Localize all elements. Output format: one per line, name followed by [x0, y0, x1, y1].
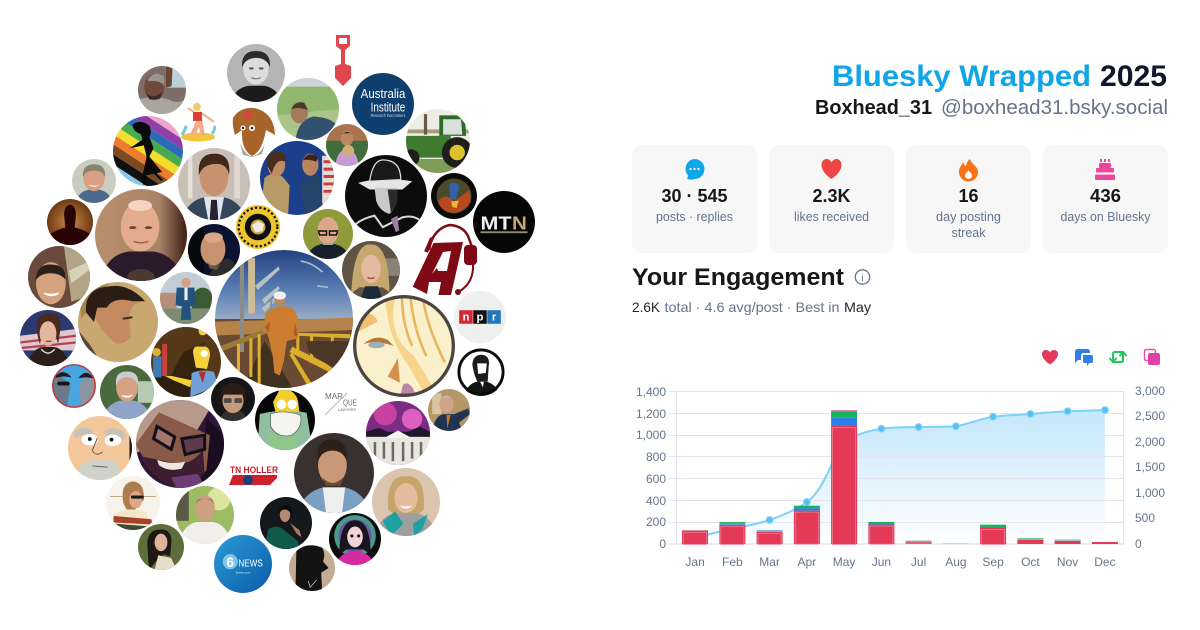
left axis labels: 400 — [646, 494, 666, 508]
avatar: Fetterman — [188, 224, 240, 276]
avatar: The Australia Institute logo: Institute — [371, 99, 405, 114]
bar: Dec — [1092, 542, 1118, 544]
grid lines — [669, 391, 1124, 544]
avatar: silhouette on amber — [47, 199, 93, 245]
panel: avatar cluster — [20, 35, 535, 593]
icon: info — [855, 270, 870, 284]
month labels: Jan — [685, 555, 705, 569]
panel: stat cards — [632, 145, 1168, 253]
icon: info: i — [861, 273, 864, 284]
left axis labels: 1,400 — [636, 385, 666, 399]
avatar: man in suit — [178, 148, 250, 220]
month labels: Mar — [759, 555, 780, 569]
avatar: coconut drink — [326, 124, 368, 166]
avatar: green tractor — [403, 109, 473, 173]
card: day posting streak — [906, 145, 1031, 253]
bar: Feb — [719, 522, 745, 544]
avatar: 6 News logo: NEWS — [238, 558, 263, 569]
engagement summary: total · 4.6 avg/post · Best in — [664, 299, 840, 315]
avatar: man with dark glasses — [211, 377, 255, 421]
card: likes received: 2.3K — [812, 186, 850, 206]
bar: May — [831, 410, 857, 544]
card: likes received — [769, 145, 894, 253]
avatar: NPR logo: r — [492, 312, 497, 324]
logo: Marque Lawyers — [325, 391, 357, 415]
avatar: Simpsons bearded old man — [255, 389, 315, 451]
avatar: woman greyscale — [227, 44, 285, 102]
card: day posting streak: streak — [952, 226, 986, 240]
icon: replies — [1075, 349, 1093, 366]
left axis labels: 800 — [646, 450, 666, 464]
right axis labels: 0 — [1135, 537, 1142, 551]
right axis labels: 500 — [1135, 511, 1155, 525]
avatar: bearded man with glasses — [136, 400, 224, 488]
left axis labels — [636, 385, 666, 551]
month labels: Apr — [798, 555, 816, 569]
bar: Aug — [943, 543, 969, 544]
avatar: woman in green garden — [138, 524, 184, 570]
avatar: fiery painting — [431, 173, 477, 219]
bar: Jul — [906, 540, 932, 544]
logo: Marque Lawyers: LAWYERS — [338, 407, 356, 412]
avatar: cartoon old man — [68, 416, 135, 480]
avatar: NPR logo: p — [476, 312, 484, 324]
panel: header — [815, 60, 1168, 119]
logo: Marque Lawyers: MAR — [325, 391, 343, 401]
right axis labels: 2,000 — [1135, 435, 1165, 449]
card: posts and replies — [632, 145, 757, 253]
avatar: Harris handshake — [260, 141, 334, 215]
display name and handle — [815, 97, 1168, 119]
left axis labels: 0 — [659, 537, 666, 551]
avatar: bald man — [95, 189, 187, 286]
bar: Mar — [757, 530, 783, 544]
avatar: MTN logo: MT — [480, 212, 512, 233]
avatar: rhett badge — [236, 205, 280, 249]
month labels: Jun — [872, 555, 891, 569]
avatar: The Australia Institute logo: Research that matters — [371, 113, 405, 118]
avatar: NPR logo — [454, 291, 506, 343]
chart: monthly engagement — [636, 384, 1165, 569]
avatar: woman in green dress — [260, 497, 312, 549]
avatar: bald man with glasses — [303, 209, 353, 259]
avatar: woman with flag — [20, 310, 76, 366]
title: Bluesky Wrapped — [832, 60, 1091, 93]
avatar: big photo refinery worker — [215, 250, 353, 388]
icon: surfer girl — [181, 103, 215, 142]
card: day posting streak: 16 — [958, 186, 978, 206]
month labels: Nov — [1057, 555, 1078, 569]
avatar: The Australia Institute logo — [352, 73, 414, 135]
display name and handle: Boxhead_31 — [815, 97, 932, 119]
engagement summary: May — [844, 299, 871, 315]
left axis labels: 600 — [646, 472, 666, 486]
avatar: long-haired blonde woman — [342, 241, 400, 299]
avatar: Schumer — [428, 389, 470, 431]
left axis labels: 1,000 — [636, 428, 666, 442]
month labels: Feb — [722, 555, 743, 569]
display name and handle: @boxhead31.bsky.social — [941, 97, 1168, 119]
month labels: Dec — [1094, 555, 1116, 569]
icon: quotes — [1144, 350, 1160, 365]
month labels: Oct — [1021, 555, 1040, 569]
bar: Jan — [682, 530, 708, 544]
avatar: Cuban selfie — [28, 246, 90, 308]
avatar: The Australia Institute logo: Australia — [361, 86, 406, 101]
cumulative area — [695, 410, 1105, 544]
title: 2025 — [1100, 60, 1167, 93]
avatar: man in white shirt — [176, 486, 234, 544]
month labels: May — [833, 555, 855, 569]
avatar: blonde hand illustration — [353, 295, 455, 397]
avatar: 6 News logo — [214, 535, 272, 593]
month labels: Aug — [945, 555, 967, 569]
icon: red A headset logo — [413, 225, 477, 295]
card: days on Bluesky: 436 — [1090, 186, 1121, 206]
avatar: George Takei — [100, 365, 154, 419]
bar: Sep — [980, 525, 1006, 544]
avatar: MTN logo: N — [512, 212, 527, 233]
cumulative line — [695, 406, 1108, 538]
month labels — [685, 555, 1116, 569]
right axis labels: 1,500 — [1135, 460, 1165, 474]
avatar: Lincoln engraving — [457, 348, 505, 396]
icon: reposts — [1110, 352, 1126, 362]
bar: Nov — [1055, 539, 1081, 544]
card: posts and replies: 30 · 545 — [662, 186, 728, 206]
bar: Oct — [1017, 538, 1043, 544]
avatar: noir detective — [345, 155, 427, 237]
avatar: Fiennes profile — [78, 282, 158, 362]
avatar: man blue blazer studio — [294, 433, 374, 513]
logo: Marque Lawyers: QUE — [343, 398, 357, 408]
right axis labels: 3,000 — [1135, 384, 1165, 398]
avatar: stadium selfie — [277, 78, 339, 140]
icon: shaggy dog mascot — [233, 108, 275, 157]
card: day posting streak: day posting — [936, 210, 1001, 224]
chart legend — [1042, 349, 1160, 366]
avatar: NPR logo: n — [462, 312, 469, 324]
card: days on Bluesky — [1043, 145, 1168, 253]
bar: Jun — [868, 522, 894, 544]
icon: red shovel — [335, 35, 351, 86]
heading: Your Engagement: Your Engagement — [632, 264, 844, 291]
avatar: man outdoors blue blazer — [160, 272, 214, 324]
month labels: Jul — [911, 555, 926, 569]
card: likes received: likes received — [794, 210, 869, 224]
avatar: black silhouette on beige — [289, 545, 335, 591]
logo: TN Holler — [229, 465, 278, 485]
engagement summary: 2.6K — [632, 299, 661, 315]
stacked bars — [682, 410, 1118, 544]
avatar: blonde woman smiling — [372, 468, 440, 536]
right axis labels — [1135, 384, 1165, 551]
left axis labels: 1,200 — [636, 407, 666, 421]
bar: Apr — [794, 506, 820, 544]
right axis labels: 1,000 — [1135, 486, 1165, 500]
avatar: smiling blond man — [72, 159, 116, 203]
avatar: Simpsons lawyer — [151, 327, 221, 397]
avatar: pink neon girl — [329, 513, 381, 565]
month labels: Sep — [982, 555, 1004, 569]
avatar: man with window — [138, 66, 186, 114]
avatar: MTN logo — [473, 191, 535, 253]
logo: TN Holler: TN HOLLER — [230, 465, 278, 476]
icon: likes — [1042, 350, 1058, 364]
avatar: rainbow silhouette — [113, 116, 183, 186]
avatar: 6 News logo: 6news.com — [236, 570, 251, 574]
avatar: 6 News logo: 6 — [226, 554, 234, 570]
right axis labels: 2,500 — [1135, 409, 1165, 423]
avatar: sunglasses striped sweater — [106, 476, 160, 530]
avatar: twin sunglasses — [52, 364, 96, 408]
card: days on Bluesky: days on Bluesky — [1060, 210, 1151, 224]
card: posts and replies: posts · replies — [656, 210, 733, 224]
avatar: White House nebula — [366, 401, 430, 465]
left axis labels: 200 — [646, 515, 666, 529]
